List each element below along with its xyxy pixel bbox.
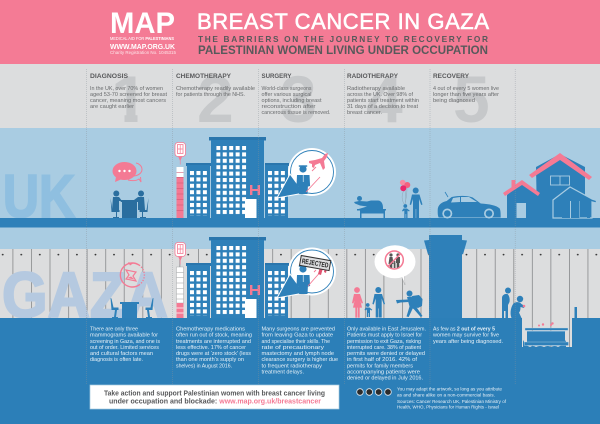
stage: radiotherapy: 31 days of a decision to treat [347, 104, 419, 110]
icon: UK patient receiving radiotherapy [354, 196, 386, 218]
stage: surgery: offer various surgical [262, 92, 312, 98]
Gaza text: recovery: women may survive for five [433, 333, 499, 339]
call to action box: Take action and support Palestinian women with breast cancer living [104, 388, 325, 398]
icon: UK hospital [186, 137, 289, 218]
logo: MAP: Charity Registration No. 1045315 [110, 50, 177, 55]
stage: radiotherapy: patients start treatment within [347, 98, 419, 104]
Gaza text: surgery: Many surgeons are prevented [262, 326, 335, 332]
Gaza text: surgery [262, 326, 338, 376]
stage: chemotherapy: for patients through the NHS. [176, 92, 245, 98]
stage dividers [86, 69, 515, 384]
icon: Gaza hospital [186, 237, 289, 318]
UK ground bar [0, 218, 600, 228]
Gaza text: radiotherapy: Only available in East Jerusalem. [347, 326, 426, 332]
Gaza text: radiotherapy [347, 326, 426, 382]
stage: diagnosis: cancer, meaning most cancers [90, 98, 166, 104]
Gaza text: diagnosis [90, 326, 160, 363]
icon: Gaza empty consulting table [110, 298, 154, 318]
large stage numbers: 3 [280, 62, 317, 136]
call to action box [90, 385, 339, 409]
subtitle [198, 34, 488, 57]
Gaza text: surgery: from leaving Gaza to update [262, 333, 333, 339]
icon: Gaza soldier [396, 290, 422, 317]
icon: UK family with balloons [400, 180, 422, 218]
stage: diagnosis: In the UK, over 70% of women [90, 86, 163, 92]
Gaza text: chemotherapy: drugs were at ‘zero stock’ (less [176, 351, 251, 357]
subtitle: THE BARRIERS ON THE JOURNEY TO RECOVERY FOR [198, 34, 488, 44]
subtitle: PALESTINIAN WOMEN LIVING UNDER OCCUPATION [198, 43, 488, 57]
Gaza text: diagnosis: There are only three [90, 326, 138, 332]
callout: Gaza surgeon travel rejected: REJECTED [301, 258, 329, 270]
stage: surgery: SURGERY [262, 73, 292, 80]
stage: radiotherapy: Radiotherapy available [347, 86, 405, 92]
Gaza text: surgery: clearance surgery is higher due [262, 357, 338, 363]
licence and sources: Sources: Cancer Research UK, Palestinian Ministry of [397, 399, 507, 404]
Gaza text: radiotherapy: Patients must apply to Israel for [347, 333, 422, 339]
large stage numbers: 5 [453, 62, 490, 136]
Gaza text: diagnosis: out of order. Limited services [90, 345, 159, 351]
stage: chemotherapy: Chemotherapy readily available [176, 86, 255, 92]
Gaza text: radiotherapy: denied or delayed in July 2016. [347, 376, 423, 382]
Gaza text: surgery: to frequent radiotherapy [262, 363, 322, 369]
stage: recovery: longer than five years after [433, 92, 499, 98]
icon: grave with flowers [523, 307, 577, 348]
icon: Gaza family [352, 287, 385, 318]
Gaza text: chemotherapy [176, 326, 252, 369]
Gaza text: recovery [433, 326, 503, 345]
large stage numbers: 1 [111, 62, 148, 136]
stage: surgery: World-class surgeons [262, 86, 312, 92]
Gaza text: chemotherapy: than one month’s supply on [176, 357, 244, 363]
Gaza text: diagnosis: mammograms available for [90, 333, 158, 339]
logo: MAP: MEDICAL AID FOR PALESTINIANS [110, 36, 174, 41]
stage: radiotherapy: RADIOTHERAPY [347, 73, 399, 80]
icon: Gaza drip chart [175, 242, 186, 318]
logo: MAP [110, 7, 177, 55]
lower blue panel [0, 318, 600, 424]
grey stage strip [0, 64, 600, 128]
stage: radiotherapy: across the UK. Over 98% of [347, 92, 414, 98]
Gaza text: radiotherapy: permits were denied or delayed [347, 351, 425, 357]
large stage numbers: 2 [197, 62, 234, 136]
UK sky band [0, 128, 600, 249]
stage: recovery: RECOVERY [433, 73, 470, 80]
Gaza text: surgery: mastectomy and lymph node [262, 351, 334, 357]
Gaza text: chemotherapy: Chemotherapy medications [176, 326, 245, 332]
Gaza text: chemotherapy: treatments are interrupted and [176, 339, 251, 345]
stage: radiotherapy: breast cancer. [347, 110, 382, 116]
Gaza text: recovery: As few as 2 out of every 5 [433, 326, 495, 332]
icon: Gaza hourglass waiting [120, 262, 144, 287]
stage: diagnosis: are caught earlier [90, 104, 134, 110]
Gaza text: diagnosis: screening in Gaza, and one is [90, 339, 160, 345]
stage: chemotherapy [176, 73, 255, 98]
stage: diagnosis [90, 73, 168, 110]
logo: MAP: MAP [110, 7, 175, 40]
logo: MAP: WWW.MAP.ORG.UK [110, 42, 176, 51]
stage: recovery [433, 73, 499, 104]
icon: UK drip chart [175, 142, 186, 218]
stage: recovery: 4 out of every 5 women live [433, 86, 499, 92]
stage: chemotherapy: CHEMOTHERAPY [176, 73, 232, 80]
stage: surgery: reconstruction after [262, 104, 316, 110]
stage: diagnosis: aged 53-70 screened for breast [90, 92, 168, 98]
Gaza text: radiotherapy: permits for family members [347, 363, 413, 369]
call to action box: under occupation and blockade: www.map.org.uk/breastcancer [109, 396, 321, 406]
Gaza text: chemotherapy: less effective. 17% of cancer [176, 345, 246, 351]
licence and sources [397, 386, 507, 410]
stage: radiotherapy [347, 73, 419, 116]
Gaza text: chemotherapy: often run out of stock, meaning [176, 333, 252, 339]
Gaza text: radiotherapy: interrupted care. 38% of patient [347, 345, 422, 351]
icon: watch tower [424, 235, 467, 318]
UK label: UK [3, 163, 75, 230]
callout: Gaza surgeon travel rejected [277, 248, 336, 298]
stage: surgery: cancerous tissue is removed. [262, 110, 330, 116]
stage: recovery: being diagnosed [433, 98, 475, 104]
Gaza wall [0, 249, 600, 349]
large stage numbers: 4 [366, 62, 403, 136]
Gaza text: diagnosis: diagnosis is often late. [90, 357, 143, 363]
GAZA label: GAZA [2, 259, 168, 331]
Gaza text: surgery: and specialise their skills. The [262, 339, 330, 345]
Gaza text: radiotherapy: accompanying patients were [347, 370, 420, 376]
large stage numbers [116, 76, 488, 122]
Gaza text: chemotherapy: shelves) in August 2016. [176, 363, 232, 369]
Gaza text: surgery: rate of precautionary [262, 345, 324, 351]
icon: UK doctor and patient at table [110, 190, 148, 218]
Gaza text: recovery: years after being diagnosed. [433, 339, 503, 345]
callout: Gaza family denied permit [374, 245, 416, 285]
licence and sources: as and share alike on a non-commercial basis. [397, 392, 495, 398]
licence and sources: You may adapt the artwork, so long as you attribute [397, 386, 502, 392]
Gaza text: radiotherapy: permission to exit Gaza, risking [347, 339, 421, 345]
icon: UK house [503, 153, 596, 218]
stage: surgery: options, including breast [262, 98, 322, 104]
Gaza text: radiotherapy: in first half of 2016. 42% of [347, 357, 418, 363]
Gaza text: surgery: treatment delays. [262, 370, 304, 376]
stage: diagnosis: DIAGNOSIS [90, 73, 128, 80]
title: BREAST CANCER IN GAZA [197, 9, 489, 34]
icon: mourners at grave [502, 288, 525, 318]
icon: creative commons badges [357, 389, 391, 395]
Gaza text: diagnosis: and cultural factors mean [90, 351, 153, 357]
header band [0, 0, 600, 64]
icon: UK consultation speech bubbles [112, 162, 142, 182]
licence and sources: Health, WHO, Physicians for Human Rights - Israel [397, 404, 499, 410]
callout: UK surgeon free to travel [277, 148, 336, 198]
icon: UK car [438, 192, 501, 218]
stage: surgery [262, 73, 330, 116]
